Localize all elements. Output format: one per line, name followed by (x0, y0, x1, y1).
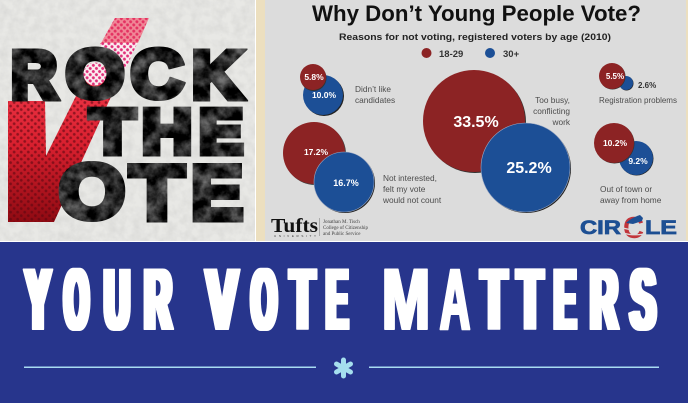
bubbles: out of town (594, 123, 654, 176)
logo: CIRCLE: C (623, 210, 644, 245)
legend: 30+ (503, 49, 520, 60)
headline: YOUR VOTE MATTERS: U (104, 252, 130, 348)
headline: YOUR VOTE MATTERS: M (382, 252, 430, 348)
logo: CIRCLE: CIR (580, 218, 621, 239)
headline: YOUR VOTE MATTERS: O (252, 252, 276, 348)
word: THE: T (90, 98, 135, 167)
bubbles: not interested (283, 122, 375, 213)
panel: blue banner: S (630, 252, 656, 348)
word: ROCK: K (192, 38, 242, 113)
legend: 18-29 (439, 49, 463, 60)
logo: Tufts University: and Public Service (323, 232, 361, 237)
panel: Rock the Vote poster (0, 0, 255, 241)
bubbles: didn't like candidates: 5.8% (304, 72, 324, 82)
headline: YOUR VOTE MATTERS: T (482, 252, 506, 348)
headline: YOUR VOTE MATTERS: R (590, 252, 618, 348)
bubbles: didn't like candidates (300, 64, 344, 116)
bubbles: too busy (423, 70, 571, 213)
panel: blue banner (0, 242, 688, 403)
left rule (24, 366, 316, 368)
legend (422, 48, 520, 60)
bubbles: didn't like candidates: 10.0% (312, 90, 336, 100)
logo: Tufts University: UNIVERSITY (274, 234, 316, 238)
headline: YOUR VOTE MATTERS: T (518, 252, 542, 348)
headline: YOUR VOTE MATTERS: O (64, 252, 88, 348)
chart subtitle: Reasons for not voting, registered voters by age (2010) (339, 32, 611, 43)
icon: asterisk (336, 360, 350, 376)
panel: survey chart (256, 0, 688, 245)
label: registration problems: Registration problems (599, 95, 677, 105)
word: OTE of VOTE: O (59, 150, 125, 235)
bubbles: not interested: 16.7% (333, 178, 359, 188)
red check mark V (8, 18, 149, 222)
headline: YOUR VOTE MATTERS: V (206, 252, 238, 348)
banner background (0, 242, 688, 403)
label: didn't like candidates: Didn’t like (355, 84, 391, 94)
chart title: Why Don’t Young People Vote? (312, 1, 641, 26)
word: ROCK (11, 37, 242, 113)
label: not interested: Not interested, (383, 173, 437, 183)
word: THE: E (199, 98, 243, 167)
bubbles: out of town: 9.2% (628, 156, 648, 166)
logo: Tufts University: Tufts (271, 215, 318, 237)
bubbles: not interested: 17.2% (304, 147, 328, 157)
headline: YOUR VOTE MATTERS (26, 252, 656, 348)
label: not interested: felt my vote (383, 184, 426, 194)
bubbles: too busy: 33.5% (453, 114, 499, 131)
logo: Tufts University (271, 215, 368, 238)
label: too busy: Too busy, (535, 95, 570, 105)
word: OTE of VOTE (59, 150, 243, 236)
beige side borders (256, 0, 688, 241)
chart background (265, 0, 686, 241)
label: out of town: away from home (600, 195, 662, 205)
logo: CIRCLE (580, 210, 677, 245)
label: too busy: work (551, 117, 571, 127)
word: ROCK: O (66, 37, 124, 112)
headline: YOUR VOTE MATTERS: Y (26, 252, 50, 348)
red and white dots inside the O of ROCK (84, 62, 106, 86)
label: too busy: conflicting (533, 106, 570, 116)
word: THE: H (142, 98, 192, 167)
bubbles: out of town: 10.2% (603, 138, 627, 148)
headline: YOUR VOTE MATTERS: E (554, 252, 576, 348)
headline: YOUR VOTE MATTERS: E (326, 252, 348, 348)
bubbles: registration problems: 2.6% (638, 81, 656, 90)
headline: YOUR VOTE MATTERS: R (144, 252, 172, 348)
headline: YOUR VOTE MATTERS: T (290, 252, 314, 348)
right rule (369, 366, 659, 368)
label: not interested: would not count (382, 195, 442, 205)
word: ROCK: R (11, 38, 57, 113)
logo: CIRCLE: LE (645, 218, 677, 239)
word: OTE of VOTE: T (130, 151, 184, 236)
word: ROCK: C (131, 37, 183, 112)
word: THE (90, 98, 243, 167)
word: OTE of VOTE: E (191, 151, 243, 236)
bubbles: registration problems: 5.5% (606, 72, 624, 81)
bubbles: registration problems (599, 63, 656, 90)
label: didn't like candidates: candidates (355, 95, 395, 105)
logo: Tufts University: College of Citizenship (323, 226, 368, 231)
bubbles: too busy: 25.2% (506, 160, 552, 177)
label: out of town: Out of town or (600, 184, 652, 194)
headline: YOUR VOTE MATTERS: A (440, 252, 470, 348)
poster paper background (0, 0, 255, 241)
logo: Tufts University: Jonathan M. Tisch (323, 220, 360, 225)
